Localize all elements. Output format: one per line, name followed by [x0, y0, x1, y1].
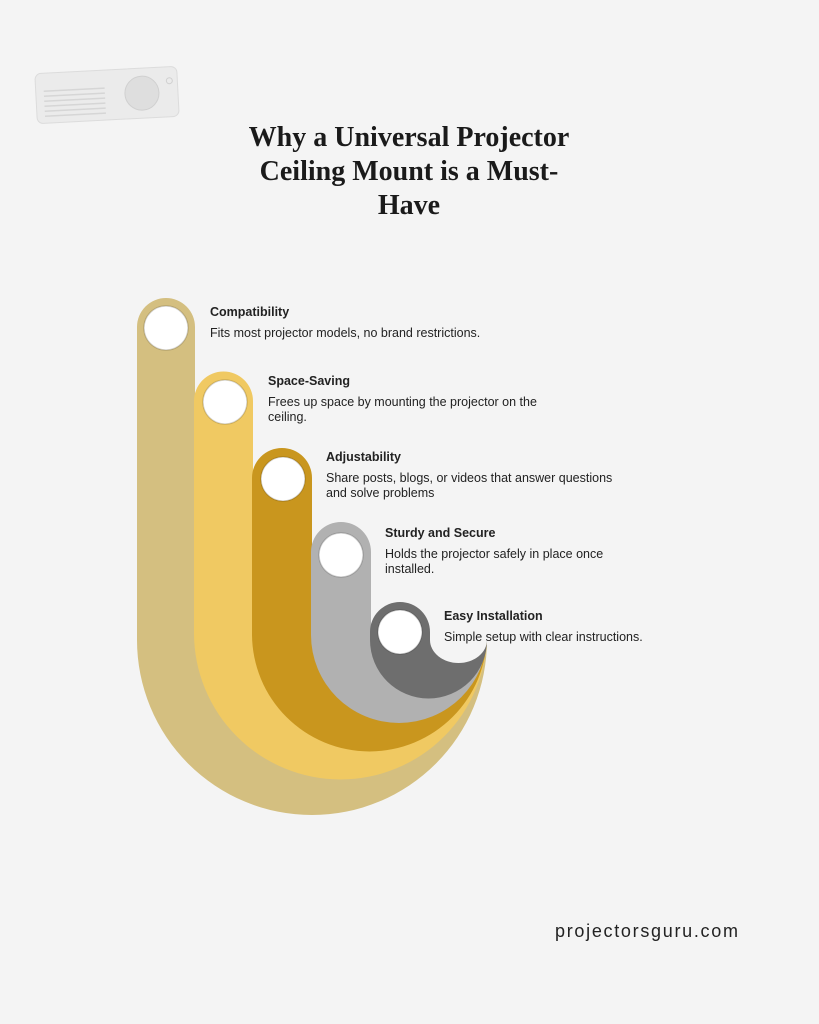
text: sturdy [385, 526, 603, 576]
text: sturdy: installed. [385, 562, 434, 576]
text: compatibility [210, 305, 480, 340]
cutout [430, 640, 487, 663]
text: easy installation: Easy Installation [444, 609, 543, 623]
text: easy installation: Simple setup with clear instructions. [444, 630, 643, 644]
title: Have [378, 190, 440, 221]
title: Why a Universal Projector [249, 122, 569, 153]
text: space-saving: Space-Saving [268, 374, 350, 388]
band: dark grey [370, 602, 487, 698]
title: Ceiling Mount is a Must- [260, 156, 558, 187]
icon: projector [34, 66, 180, 124]
text: sturdy: Holds the projector safely in place once [385, 546, 603, 560]
text: compatibility: Compatibility [210, 305, 289, 319]
band: dark gold [252, 448, 487, 751]
text: sturdy: Sturdy and Secure [385, 526, 495, 540]
text: adjustability: Share posts, blogs, or videos that answer questions [326, 470, 612, 484]
text: adjustability [326, 450, 612, 500]
title [249, 122, 569, 221]
band: light grey [311, 522, 487, 723]
footer url: projectorsguru.com [555, 921, 740, 941]
text: adjustability: Adjustability [326, 450, 401, 464]
text: adjustability: and solve problems [326, 486, 434, 500]
band: yellow [194, 372, 487, 779]
icon: circles [144, 306, 422, 654]
text: space-saving: ceiling. [268, 410, 307, 424]
text: space-saving: Frees up space by mounting the projector on the [268, 394, 537, 408]
text: easy installation [444, 609, 643, 644]
text: compatibility: Fits most projector models, no brand restrictions. [210, 326, 480, 340]
band: tan [137, 298, 487, 815]
text: space-saving [268, 374, 537, 424]
